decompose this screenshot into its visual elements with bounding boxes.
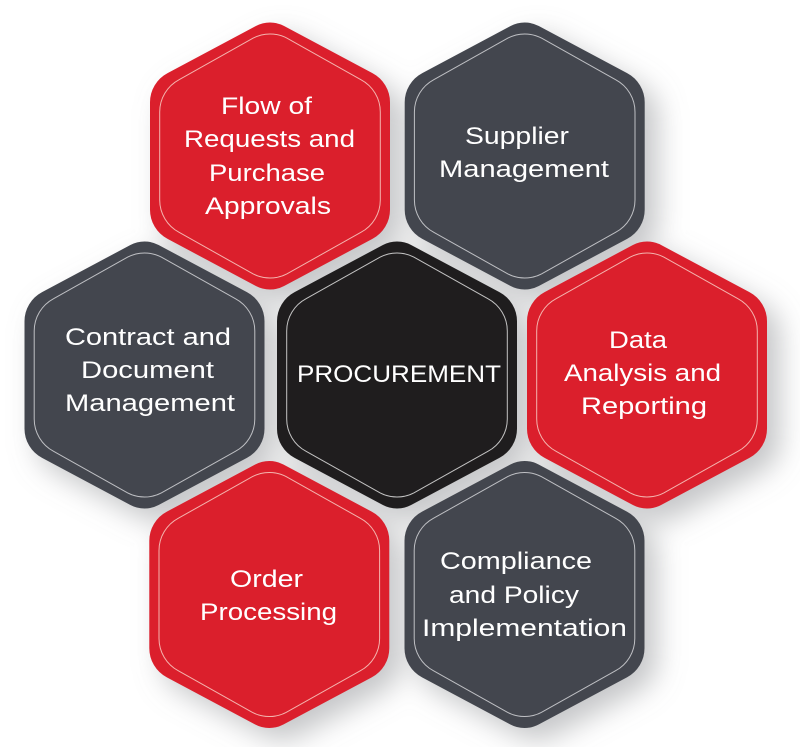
label: Data Analysis and Reporting: Analysis and xyxy=(564,360,721,387)
label: Order Processing: Order xyxy=(230,566,303,593)
hexagon: Supplier Management xyxy=(405,22,645,290)
hexagon: PROCUREMENT centre xyxy=(277,241,517,509)
label: Compliance and Policy Implementation: Implementation xyxy=(422,615,627,642)
label: Supplier Management: Management xyxy=(439,156,609,183)
label: Flow of Requests and Purchase Approvals xyxy=(184,93,355,220)
label: Contract and Document Management: Contract and xyxy=(65,324,231,351)
label: Flow of Requests and Purchase Approvals: Requests and xyxy=(184,126,355,153)
label: PROCUREMENT: PROCUREMENT xyxy=(297,361,501,388)
hexagon: Order Processing xyxy=(149,461,389,728)
label: Data Analysis and Reporting: Reporting xyxy=(581,393,707,420)
label: Flow of Requests and Purchase Approvals: Flow of xyxy=(221,93,312,120)
hexagon: Contract and Document Management xyxy=(24,241,265,509)
hexagon: Flow of Requests and Purchase Approvals xyxy=(150,22,390,290)
label: Data Analysis and Reporting xyxy=(564,327,721,420)
label: Data Analysis and Reporting: Data xyxy=(609,327,667,354)
label: Compliance and Policy Implementation xyxy=(422,548,627,642)
label: Order Processing: Processing xyxy=(200,599,337,626)
label: Flow of Requests and Purchase Approvals: Purchase xyxy=(209,160,325,187)
label: Contract and Document Management xyxy=(65,324,235,417)
label: Compliance and Policy Implementation: and Policy xyxy=(449,582,580,609)
label: Compliance and Policy Implementation: Compliance xyxy=(440,548,592,575)
hexagon: Compliance and Policy Implementation xyxy=(404,461,645,728)
label: Contract and Document Management: Management xyxy=(65,390,235,417)
label: Order Processing xyxy=(200,566,337,626)
label: Supplier Management xyxy=(439,123,609,183)
label: Flow of Requests and Purchase Approvals: Approvals xyxy=(205,193,331,220)
label: Contract and Document Management: Document xyxy=(81,357,214,384)
hexagon: Data Analysis and Reporting xyxy=(527,241,767,509)
label: Supplier Management: Supplier xyxy=(465,123,569,150)
